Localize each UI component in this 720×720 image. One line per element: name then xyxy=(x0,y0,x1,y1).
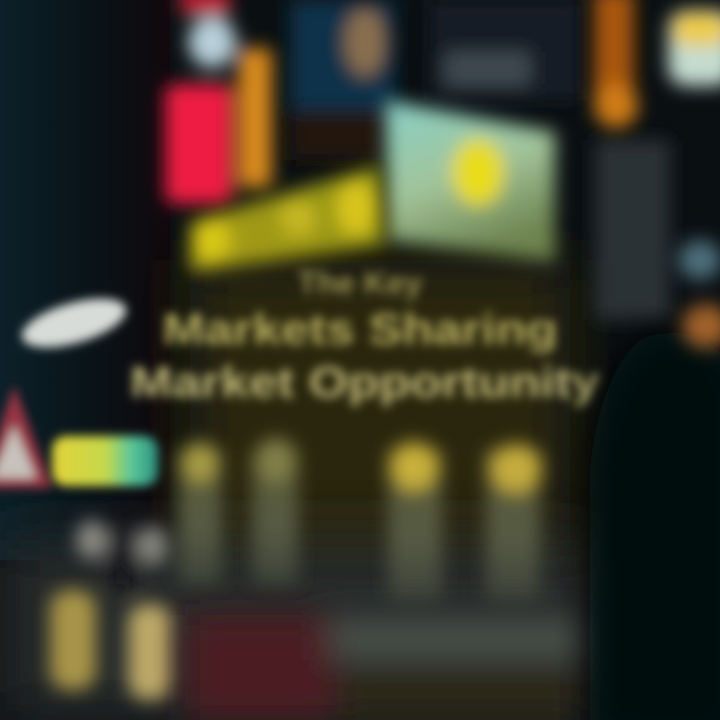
column 4 xyxy=(486,444,542,600)
panel: top right lit sign xyxy=(668,10,720,86)
icon: road warning triangle xyxy=(0,385,52,488)
heading: blurred sign text xyxy=(130,265,601,407)
panel: pedestrians and reflections xyxy=(50,520,172,700)
panel: yellow to teal bar sign xyxy=(52,436,158,486)
panel: teal billboard xyxy=(385,100,555,262)
heading: blurred sign text: The Key xyxy=(298,265,422,301)
panel: dark foreground silhouette xyxy=(590,332,720,720)
panel: wet ground xyxy=(185,615,585,720)
icon: yellow disc xyxy=(452,138,504,206)
panel: orange hanging sign xyxy=(594,0,638,128)
heading: blurred sign text: Market Opportunity xyxy=(130,358,601,407)
panel: white oval sign xyxy=(17,289,131,357)
panel: yellow marquee sign xyxy=(190,165,385,272)
panel: right side glowing signs xyxy=(678,240,720,348)
column 2 xyxy=(252,438,298,585)
icon: red and white lantern sign xyxy=(165,0,272,204)
heading: blurred sign text: Markets Sharing xyxy=(162,305,558,354)
column 1 xyxy=(178,442,222,585)
panel: row of four columns xyxy=(178,438,542,600)
panel: top storefronts xyxy=(290,0,670,320)
column 3 xyxy=(388,442,442,600)
